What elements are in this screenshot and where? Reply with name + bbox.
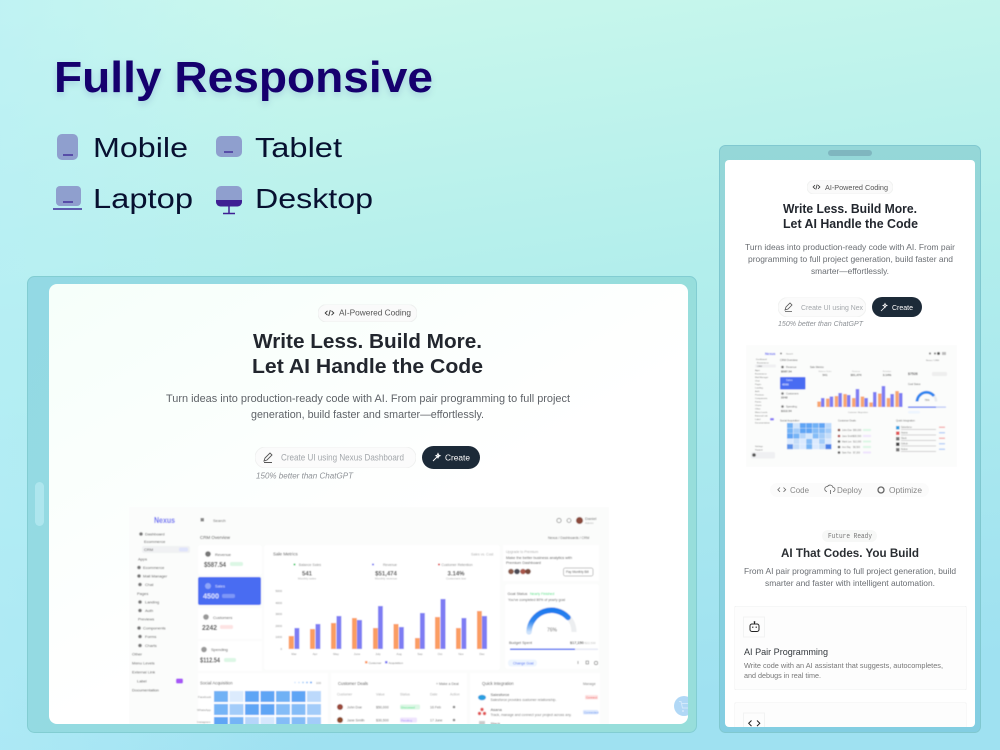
sidebar: Landing xyxy=(145,600,159,604)
section paragraph xyxy=(744,566,956,588)
sidebar: Previews xyxy=(138,616,154,622)
KPI cards: Spending xyxy=(211,647,228,652)
paragraph: smarter—effortlessly. xyxy=(811,266,889,276)
device list xyxy=(53,132,373,214)
sidebar: Support xyxy=(755,448,763,452)
quick integration list: Asana xyxy=(901,432,908,434)
top bar: Admin xyxy=(585,521,594,525)
KPI cards: Sales xyxy=(215,584,225,588)
upgrade card xyxy=(908,372,947,386)
social acquisition heatmap: Social Acquisition xyxy=(200,680,233,686)
top bar xyxy=(780,352,946,362)
customer deals table xyxy=(336,682,460,724)
tablet home handle xyxy=(35,482,44,526)
sales bar chart: Nov xyxy=(458,652,464,656)
icon: tablet xyxy=(216,136,242,157)
customer deals table: Customer Deals xyxy=(838,420,857,422)
sales bar chart: 4000 xyxy=(275,601,282,605)
goal gauge card: You've completed 80% of yearly goal xyxy=(508,598,565,602)
top bar: CRM Overview xyxy=(200,535,230,541)
customer deals table: Discussed xyxy=(401,706,415,710)
badge: Future Ready xyxy=(828,532,872,540)
paragraph: generation, build faster and smarter—effortlessly. xyxy=(251,409,484,421)
cart button xyxy=(674,696,688,716)
top bar: Nexus / CRM xyxy=(926,360,939,362)
upgrade card: Upgrade to Premium xyxy=(506,550,538,554)
customer deals table: $30,500 xyxy=(853,436,862,438)
customer deals table: Customer xyxy=(337,692,353,696)
sales bar chart: Sales vs. Cost xyxy=(471,552,493,556)
phone notch xyxy=(828,150,872,156)
workflow pills xyxy=(777,484,922,494)
sales bar chart: Oct xyxy=(438,652,442,656)
goal gauge card: /$22,500 xyxy=(584,641,596,645)
sales bar chart: 3.14% xyxy=(447,572,465,578)
sales bar chart: Customer / Acquisition xyxy=(848,411,868,414)
customer deals table: $9,500 xyxy=(853,447,861,449)
customer deals table: Date xyxy=(430,692,437,696)
sales bar chart: Revenue xyxy=(852,371,861,373)
sidebar: Pages xyxy=(137,591,148,596)
customer deals table: Mark Lee xyxy=(842,440,852,444)
workflow pills: Optimize xyxy=(889,486,923,495)
quick integration list: Quick Integration xyxy=(482,681,514,686)
heading: Write Less. Build More. xyxy=(783,202,917,216)
title: Fully Responsive xyxy=(54,53,433,102)
social acquisition heatmap xyxy=(196,681,322,724)
sidebar: Settings xyxy=(755,445,764,448)
KPI cards: Spending xyxy=(786,404,798,408)
panel: mobile frame xyxy=(720,146,980,742)
icon: mobile xyxy=(57,134,78,160)
paragraph: Turn ideas into production-ready code with AI. From pair programming to full project xyxy=(166,393,570,405)
sales bar chart: Revenue xyxy=(383,563,397,567)
goal gauge card: $17,150 xyxy=(570,641,584,645)
sales bar chart: July xyxy=(375,652,381,656)
create button xyxy=(422,446,480,469)
top bar: Daniel xyxy=(585,516,596,521)
sidebar: Ecommerce xyxy=(757,362,769,364)
sidebar: Mail Manager xyxy=(755,376,769,379)
quick integration list: Manage xyxy=(583,682,596,686)
sales bar chart: Customer Retention xyxy=(441,563,473,567)
KPI cards: $112.54 xyxy=(781,409,792,413)
sales bar chart: Balance Sales xyxy=(299,563,321,567)
sales bar chart: Monthly sales xyxy=(298,576,317,580)
quick integration list: Salesforce xyxy=(490,692,510,697)
social acquisition heatmap: Facebook xyxy=(198,695,212,699)
sidebar: Landing xyxy=(755,388,764,390)
sales bar chart: 1000 xyxy=(275,635,282,639)
icon: robot xyxy=(744,617,764,637)
goal gauge card: Budget Spent xyxy=(509,641,533,645)
panel: tablet frame xyxy=(28,276,696,732)
sales bar chart xyxy=(810,366,902,414)
sidebar: External Link xyxy=(755,414,769,418)
icon: code xyxy=(744,713,764,733)
card: AI Pair Programming: and debugs in real time. xyxy=(744,671,821,680)
sales bar chart: Dec xyxy=(479,652,485,656)
sales bar chart: Monthly revenue xyxy=(375,576,397,580)
sidebar: Label xyxy=(755,419,761,421)
customer deals table: Jane Smith xyxy=(842,435,854,438)
icon: laptop xyxy=(53,186,82,209)
sidebar: Previews xyxy=(755,394,765,396)
sidebar: Chat xyxy=(145,582,154,587)
customer deals table: Action xyxy=(450,692,460,696)
paragraph xyxy=(745,242,955,276)
section paragraph: From AI pair programming to full project generation, build xyxy=(744,566,956,576)
sidebar: Documentation xyxy=(755,422,770,424)
social acquisition heatmap: 100 xyxy=(316,681,321,685)
sales bar chart: 0 xyxy=(280,647,282,651)
dashboard preview xyxy=(751,351,947,458)
KPI cards: $587.54 xyxy=(781,370,792,374)
sales bar chart: Apr xyxy=(313,652,317,656)
sales bar chart: Balance Sales xyxy=(819,371,831,373)
quick integration list xyxy=(896,420,945,452)
heading: Write Less. Build More. xyxy=(253,330,482,353)
sales bar chart: Customer xyxy=(368,661,382,665)
badge: AI-Powered Coding: AI-Powered Coding xyxy=(825,183,888,192)
sales bar chart: June xyxy=(354,652,361,656)
sales bar chart: 541 xyxy=(822,373,828,377)
goal gauge xyxy=(908,392,946,414)
sidebar: Dashboard xyxy=(756,358,767,361)
sales bar chart: Sale Metrics xyxy=(273,552,299,556)
sidebar: CRM xyxy=(757,366,762,368)
KPI cards xyxy=(780,365,806,413)
prompt input: Create UI using Nexus Dashboard xyxy=(281,452,404,462)
sales bar chart: Aug xyxy=(396,652,402,656)
sidebar: Forms xyxy=(145,634,156,639)
card: AI Pair Programming: AI Pair Programming xyxy=(744,647,828,658)
customer deals table: Status xyxy=(400,692,410,696)
sidebar: Components xyxy=(143,626,166,630)
paragraph xyxy=(166,393,570,421)
sales bar chart: $51,474 xyxy=(851,373,862,377)
icon: desktop xyxy=(216,186,242,214)
sales bar chart: 5000 xyxy=(275,589,282,593)
sales bar chart: Sale Metrics xyxy=(810,366,825,369)
screen: tablet xyxy=(49,284,694,728)
sidebar: Mail Manager xyxy=(143,574,168,578)
sales bar chart: Sep xyxy=(417,652,423,656)
top bar xyxy=(200,516,596,541)
customer deals table: Value xyxy=(376,692,385,696)
social acquisition heatmap: Social Acquisition xyxy=(780,420,800,422)
quick integration list: Connected xyxy=(584,710,599,714)
goal gauge card: 76% xyxy=(547,628,558,634)
quick integration list: Slack xyxy=(901,438,907,440)
sidebar: Ecommerce xyxy=(755,372,767,376)
KPI cards: $112.54 xyxy=(200,658,220,664)
upgrade card: Pay Monthly Bill xyxy=(566,570,589,574)
comparison note: 150% better than ChatGPT xyxy=(256,470,354,480)
customer deals table: Sam Fox xyxy=(842,452,852,454)
KPI cards: Customers xyxy=(786,392,799,396)
sales bar chart: 3000 xyxy=(275,612,282,616)
customer deals table: Pending xyxy=(401,718,412,722)
social acquisition heatmap: WhatsApp xyxy=(197,708,211,712)
quick integration list: Notion xyxy=(901,448,908,451)
customer deals table: $50,000 xyxy=(376,706,389,710)
sidebar: Charts xyxy=(755,404,762,407)
customer deals table xyxy=(838,420,871,454)
sales bar chart: Customers lost xyxy=(446,576,466,580)
prompt input: Create UI using Nex xyxy=(801,303,863,312)
customer deals table: Ann Ray xyxy=(842,446,852,449)
heading: Let AI Handle the Code xyxy=(252,355,483,378)
customer deals table: John Doe xyxy=(842,430,853,432)
dashboard preview xyxy=(129,507,609,728)
top bar: Search xyxy=(786,352,794,356)
quick integration list: Slack xyxy=(490,721,500,726)
card: AI Pair Programming xyxy=(734,606,966,690)
label: mobile: Mobile xyxy=(93,132,188,163)
paragraph: Turn ideas into production-ready code with AI. From pair xyxy=(745,242,955,252)
sidebar xyxy=(751,352,776,458)
sidebar: Chat xyxy=(755,380,760,382)
sidebar: Label xyxy=(137,678,147,684)
top bar: CRM Overview xyxy=(780,358,798,362)
section paragraph: smarter and faster with intelligent automation. xyxy=(765,578,935,588)
customer deals table: $12,000 xyxy=(853,442,862,444)
KPI cards: 4500 xyxy=(782,382,789,386)
customer deals table: $50,000 xyxy=(853,430,862,432)
card: AI Pair Programming: Write code with an AI assistant that suggests, autocompletes, xyxy=(744,661,943,670)
screen: mobile xyxy=(725,160,975,742)
KPI cards: 4500 xyxy=(203,594,219,600)
badge: AI-Powered Coding xyxy=(807,180,893,194)
heading xyxy=(253,333,482,373)
quick integration list xyxy=(477,682,599,724)
card: code generation xyxy=(734,702,966,742)
quick integration list: Github xyxy=(901,442,908,446)
paragraph: programming to full project generation, build faster and xyxy=(748,254,953,264)
sidebar: Nexus xyxy=(765,352,776,356)
KPI cards: Revenue xyxy=(786,365,797,369)
goal gauge card: Change Goal xyxy=(513,662,534,666)
quick integration list: Quick Integration xyxy=(896,420,916,422)
sales bar chart: 541 xyxy=(302,572,313,578)
sidebar: Components xyxy=(755,397,768,400)
create button: Create xyxy=(445,452,470,462)
sales bar chart xyxy=(273,552,494,664)
sidebar: Pages xyxy=(755,384,762,386)
sidebar: CRM xyxy=(144,547,153,552)
sidebar: Other xyxy=(132,652,143,656)
quick integration list: Asana xyxy=(490,707,503,712)
badge: AI-Powered Coding: AI-Powered Coding xyxy=(339,308,411,318)
sidebar: Menu Levels xyxy=(132,660,155,666)
customer deals table: $30,500 xyxy=(376,718,389,722)
customer deals table: + Make a Deal xyxy=(436,682,459,686)
sidebar: Auth xyxy=(755,390,760,393)
sidebar: Auth xyxy=(145,608,153,613)
workflow pills: Deploy xyxy=(837,486,862,495)
sidebar: Documentation xyxy=(132,688,159,692)
KPI cards: 2242 xyxy=(202,625,217,632)
sidebar: Apps xyxy=(138,556,147,562)
sales bar chart: 2000 xyxy=(275,624,282,628)
social acquisition heatmap xyxy=(780,420,831,449)
top bar: Search xyxy=(213,518,226,523)
sidebar: Other xyxy=(755,408,761,410)
sidebar: Ecommerce xyxy=(143,565,165,570)
create button: Create xyxy=(892,303,913,312)
quick integration list: Salesforce provides customer relationship. xyxy=(490,698,556,702)
customer deals table: $7,200 xyxy=(853,452,861,454)
sales bar chart: 3.14% xyxy=(883,373,892,377)
sidebar: Nexus xyxy=(154,516,175,525)
upgrade card: Goal Status xyxy=(908,383,921,386)
sales bar chart: May xyxy=(333,652,339,656)
upgrade card xyxy=(506,550,594,577)
customer deals table: Customer Deals xyxy=(338,681,368,686)
label: laptop: Laptop xyxy=(93,183,193,214)
sidebar: Ecommerce xyxy=(144,539,166,544)
sidebar: Charts xyxy=(145,643,157,648)
KPI cards: 2242 xyxy=(781,396,788,400)
goal gauge: 76% xyxy=(924,399,930,402)
sidebar xyxy=(132,516,190,692)
quick integration list: Connect xyxy=(586,696,597,700)
KPI cards: Customers xyxy=(213,615,232,620)
prompt input xyxy=(255,447,416,468)
sales bar chart: Mar xyxy=(291,652,297,656)
section heading: AI That Codes. You Build xyxy=(781,546,919,560)
sidebar: Forms xyxy=(755,400,762,404)
upgrade card: $7526 xyxy=(908,372,918,376)
customer deals table: 17 June xyxy=(430,718,443,722)
prompt input xyxy=(778,298,866,317)
heading: Let AI Handle the Code xyxy=(783,217,918,231)
upgrade card: Premium Dashboard xyxy=(506,561,541,565)
badge: AI-Powered Coding xyxy=(318,304,417,322)
KPI cards: Revenue xyxy=(215,552,232,557)
goal gauge card: Goal Status xyxy=(508,592,527,596)
comparison note: 150% better than ChatGPT xyxy=(778,319,864,328)
sales bar chart: Acquisition xyxy=(388,661,403,665)
customer deals table: 16 Feb xyxy=(430,706,441,710)
quick integration list: Salesforce xyxy=(901,426,913,429)
sidebar: Dashboard xyxy=(145,532,165,536)
customer deals table: Jane Smith xyxy=(347,718,365,722)
goal gauge card xyxy=(507,592,598,666)
create button xyxy=(872,297,922,317)
sidebar: Apps xyxy=(755,369,761,372)
KPI cards: Sales xyxy=(786,378,793,382)
sales bar chart: $51,474 xyxy=(375,572,398,578)
label: desktop: Desktop xyxy=(255,183,373,214)
social acquisition heatmap: Instagram xyxy=(197,720,211,724)
heading xyxy=(783,204,918,228)
customer deals table: John Doe xyxy=(347,706,362,710)
workflow pills: Code xyxy=(790,486,810,495)
quick integration list: Track, manage and connect your project across any. xyxy=(490,713,572,717)
KPI cards: $587.54 xyxy=(204,562,226,569)
top bar: Nexus / Dashboards / CRM xyxy=(548,536,589,540)
KPI cards xyxy=(198,545,262,671)
badge: Future Ready: Future Ready xyxy=(828,533,872,541)
sales bar chart: Retention xyxy=(883,370,891,373)
sidebar: External Link xyxy=(132,670,155,674)
label: tablet: Tablet xyxy=(255,132,342,163)
goal gauge card: Nearly Finished xyxy=(530,592,554,596)
upgrade card: Make the better business analytics with xyxy=(506,556,572,560)
sidebar: Menu Levels xyxy=(755,412,768,414)
